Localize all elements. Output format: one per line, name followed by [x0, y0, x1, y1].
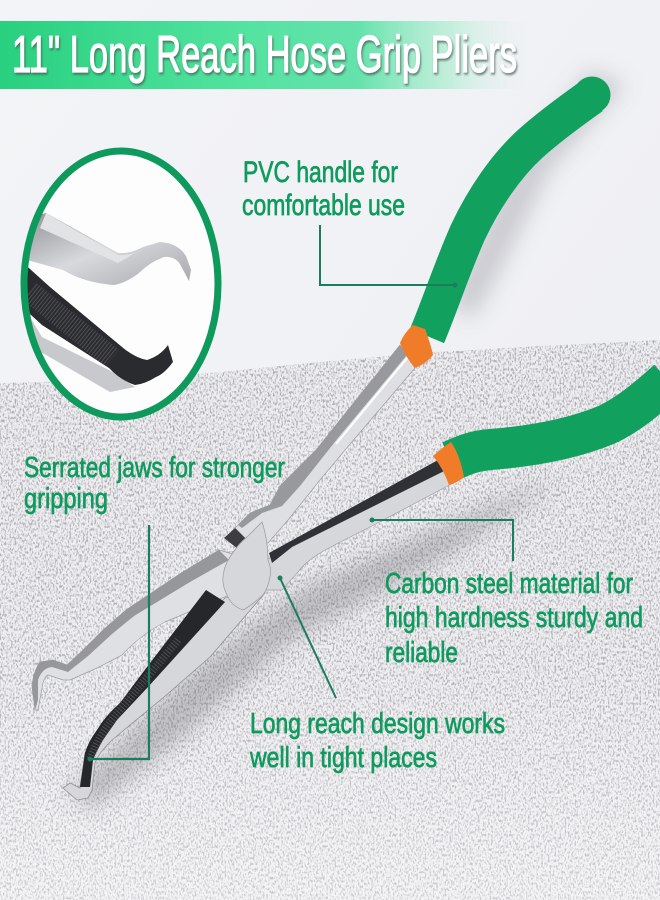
- callout: serrated jaws: gripping: [24, 483, 108, 515]
- pivot joint: [223, 522, 271, 610]
- callout: serrated jaws: [24, 452, 285, 762]
- callout: long reach: well in tight places: [249, 742, 437, 774]
- background: grey textured fabric: [0, 330, 660, 900]
- inset: silver jaw close-up: [20, 213, 191, 285]
- callout: carbon steel: reliable: [385, 637, 458, 669]
- upper plier arm: [224, 345, 415, 549]
- callout: serrated jaws: Serrated jaws for stronger: [24, 452, 285, 484]
- callout: PVC handle: [242, 156, 458, 288]
- callout: PVC handle: comfortable use: [242, 189, 405, 222]
- title banner: [0, 21, 530, 89]
- upper green handle: [427, 76, 610, 336]
- inset: black serrated jaw close-up: [20, 260, 173, 392]
- upper-left hooked jaw: [32, 550, 240, 710]
- callout: long reach: Long reach design works: [250, 708, 505, 740]
- lower hooked jaw with serrated black inner face: [63, 590, 265, 800]
- lower green handle: [451, 380, 660, 461]
- lower orange collar: [433, 442, 464, 485]
- lower plier arm with black strip: [258, 460, 459, 590]
- upper orange collar: [400, 325, 433, 368]
- callout: long reach: [249, 576, 505, 774]
- plier cast shadows: [70, 70, 625, 810]
- callout: PVC handle: PVC handle for: [243, 156, 398, 189]
- circular detail inset: [20, 151, 218, 417]
- callout: carbon steel: [370, 518, 643, 669]
